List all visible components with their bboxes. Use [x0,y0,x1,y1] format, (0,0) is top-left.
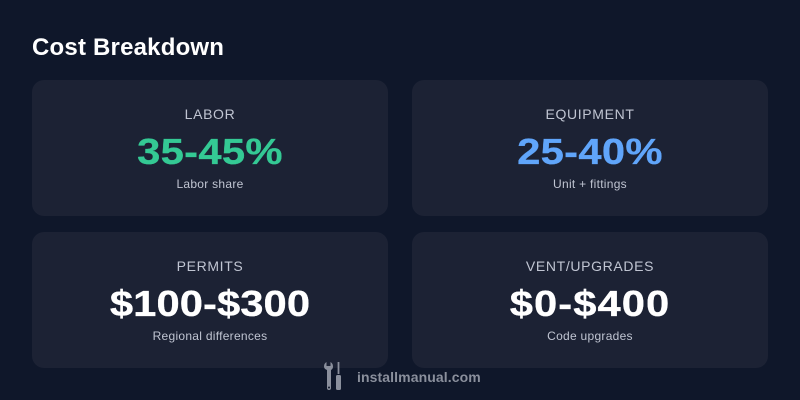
equipment value: 25-40% [517,131,663,172]
equipment heading: EQUIPMENT [545,106,635,122]
permits note: Regional differences [153,329,267,343]
permits heading: PERMITS [177,258,243,274]
panel: permits [32,232,388,368]
panel: equipment [412,80,768,216]
icon: wrench and screwdriver [324,362,341,390]
vent note: Code upgrades [547,329,633,343]
title: Cost Breakdown [32,34,224,61]
vent value: $0-$400 [510,283,670,324]
equipment note: Unit + fittings [553,177,627,191]
labor heading: LABOR [185,106,235,122]
permits value: $100-$300 [110,283,310,324]
panel: vent/upgrades [412,232,768,368]
vent heading: VENT/UPGRADES [526,258,654,274]
labor value: 35-45% [137,131,283,172]
labor note: Labor share [176,177,244,191]
panel: labor [32,80,388,216]
footer site name: installmanual.com [357,369,481,385]
